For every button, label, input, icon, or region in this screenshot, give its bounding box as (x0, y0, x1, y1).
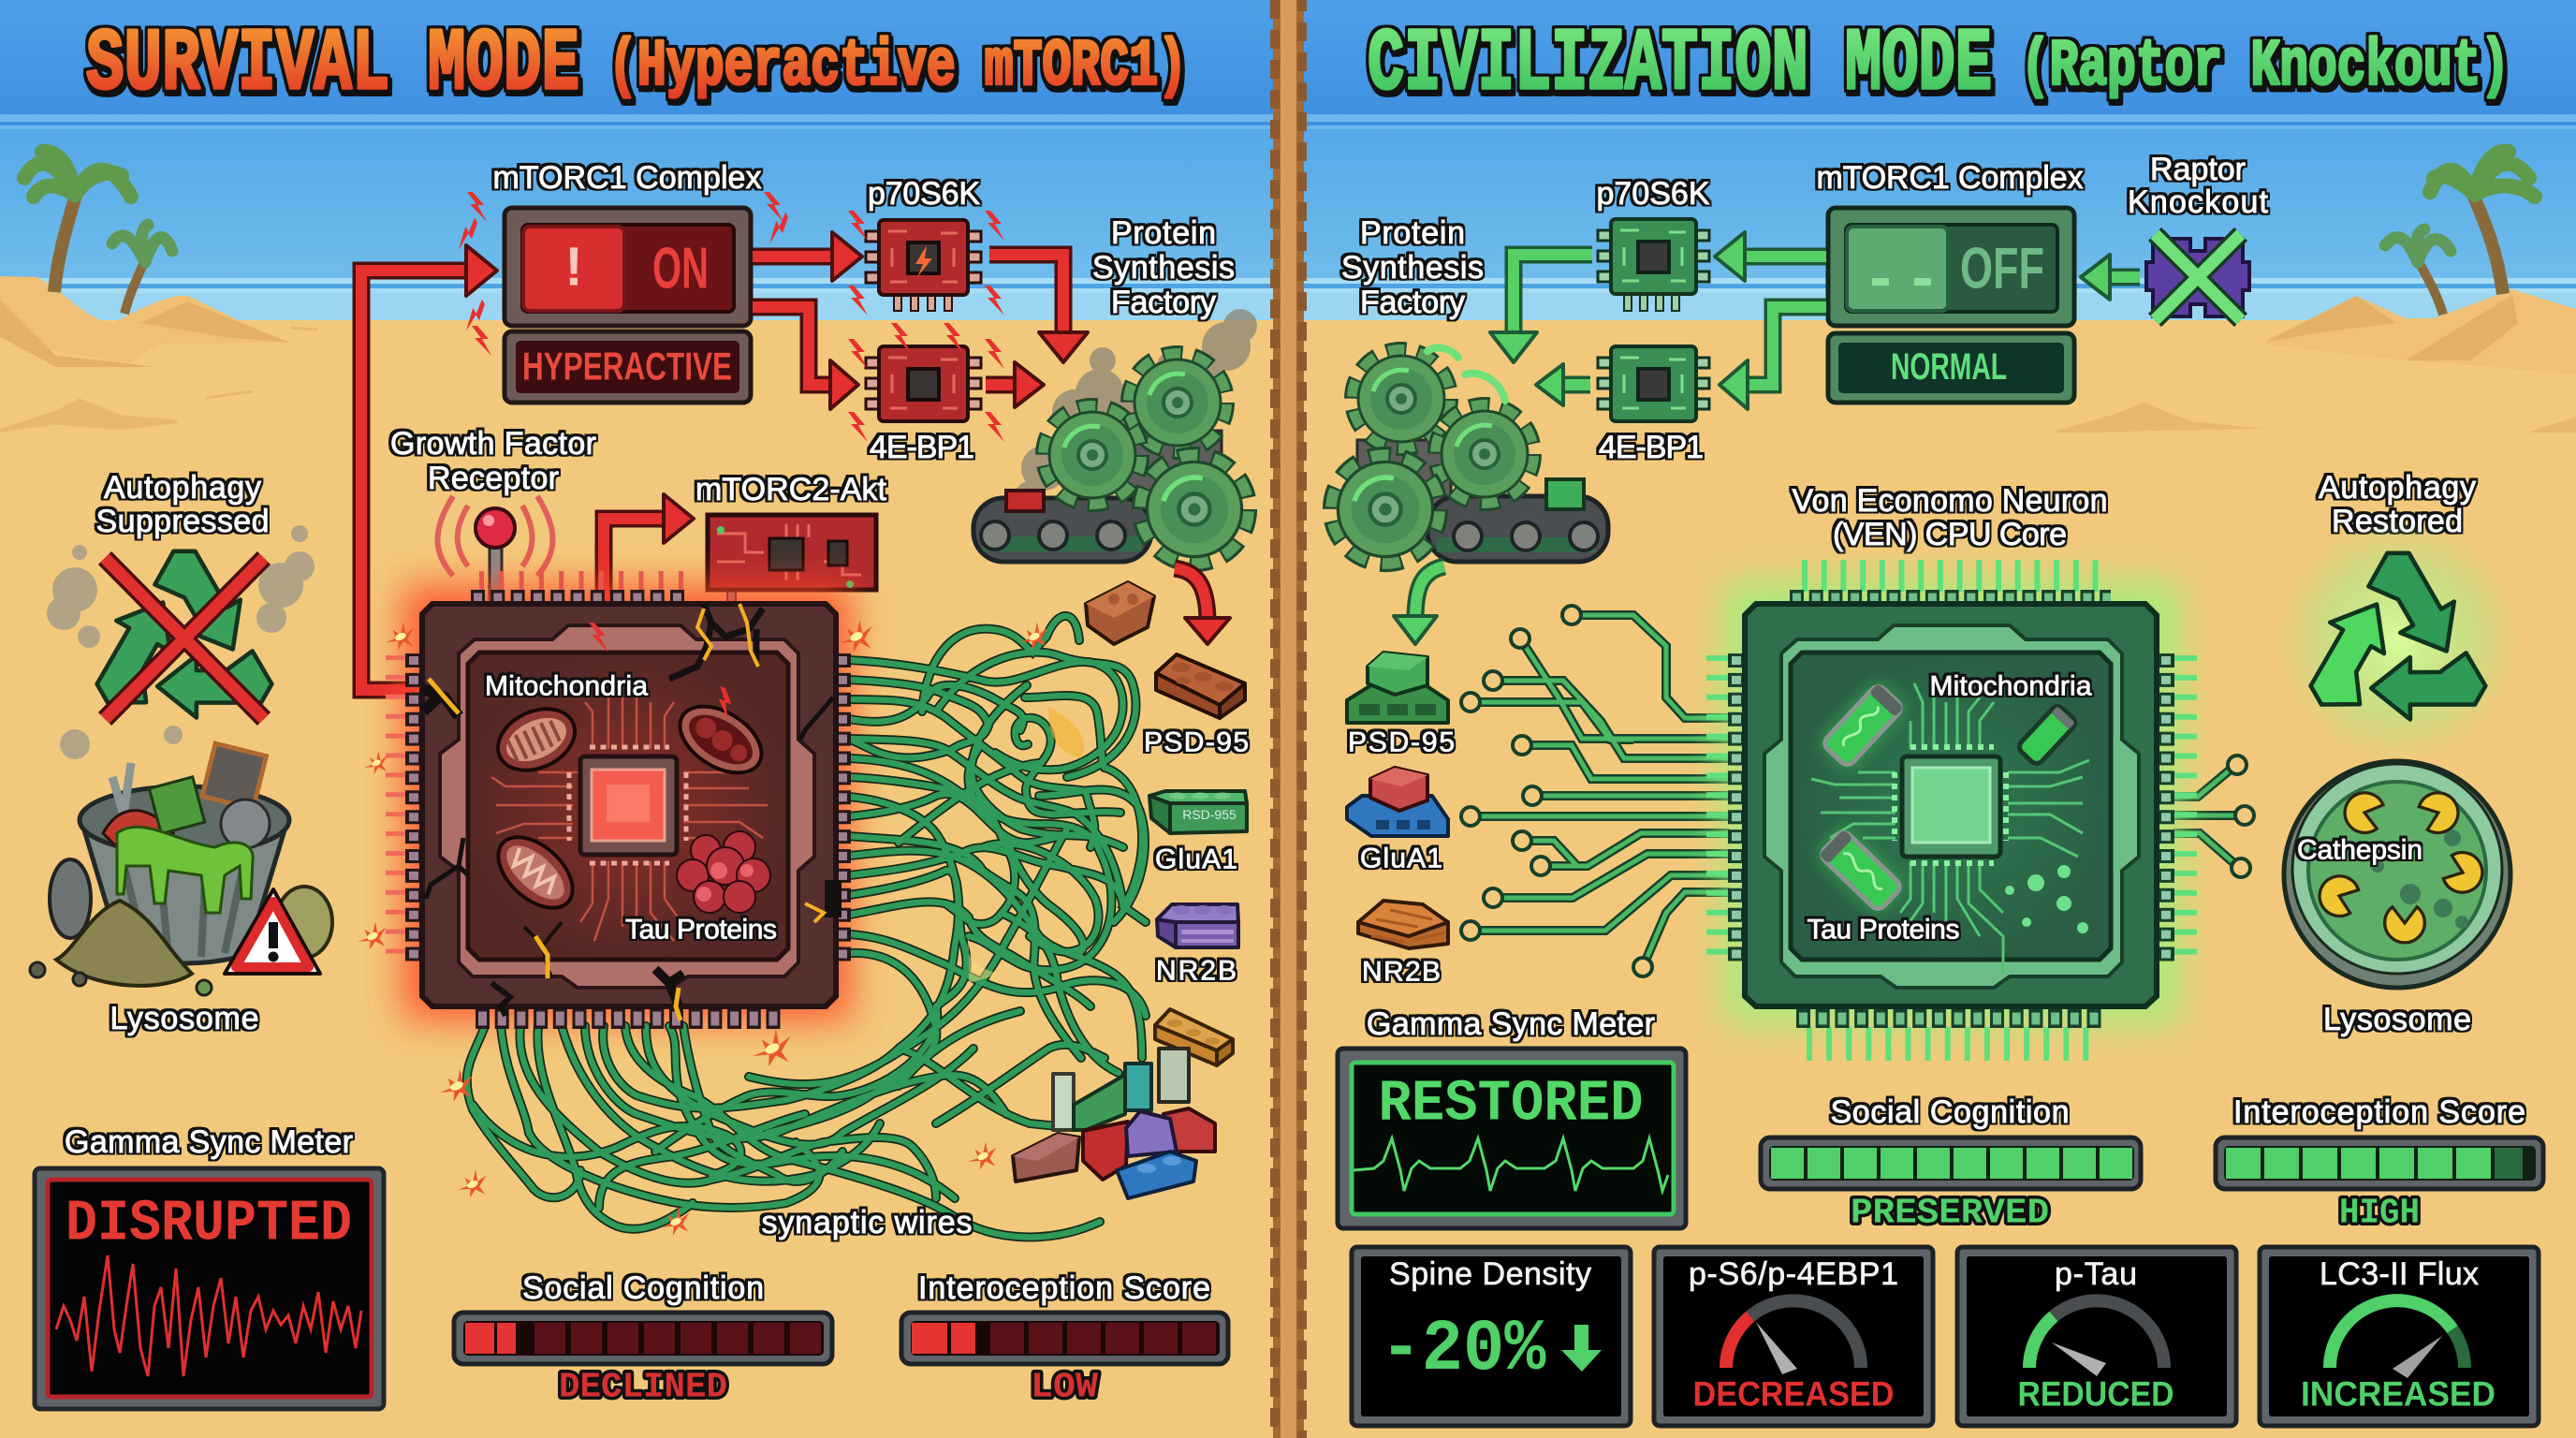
label: von economo neuron (1792, 483, 2108, 552)
label: protein synthesis factory left: Protein (1111, 215, 1216, 251)
board: mTORC2-Akt (695, 472, 887, 613)
label: protein synthesis factory right: Factory (1360, 285, 1465, 320)
chip: 4E-BP1 right (1598, 346, 1709, 465)
tau protein clump (677, 831, 770, 913)
panel: gamma sync meter restored (1338, 1006, 1686, 1228)
icon: crossed-out recycle symbol (47, 525, 315, 759)
card: LC3-II flux gauge: LC3-II Flux (2320, 1256, 2479, 1292)
icon: overflowing lysosome trash can (30, 743, 332, 995)
dirt pile (56, 901, 192, 986)
icon: PSD-95 brick right: PSD-95 (1348, 726, 1455, 758)
chip glow right (1722, 580, 2181, 1025)
icon: PSD-95 brick left: PSD-95 (1144, 726, 1249, 758)
label: protein synthesis factory left: Factory (1111, 285, 1216, 320)
panel: social cognition right (1761, 1094, 2141, 1234)
status panel: normal (1828, 333, 2074, 403)
arrow: switch to p70S6K (753, 232, 862, 281)
arrow: p70S6K to factory (989, 255, 1088, 362)
arrow: p70S6K to factory right (1490, 255, 1592, 362)
panel: social cognition left (454, 1270, 832, 1408)
label: von economo neuron: Von Economo Neuron (1792, 483, 2108, 519)
palm trees left (24, 152, 172, 314)
debris (2371, 829, 2468, 929)
chip: p70S6K left: p70S6K (868, 176, 980, 212)
arrow: switch to 4E-BP1 (753, 307, 858, 409)
label: growth factor receptor (390, 426, 596, 496)
tangled synaptic wires (467, 616, 1146, 1237)
central wooden divider (1273, 0, 1304, 1438)
panel: interoception score right (2216, 1094, 2543, 1234)
panel: mTORC1 complex switch off: mTORC1 Complex (1816, 160, 2084, 196)
panel: social cognition right: PRESERVED (1851, 1193, 2049, 1234)
card: spine density (1352, 1247, 1631, 1426)
circuit traces from chip to synapses (1461, 606, 2254, 976)
card: p-S6/p-4EBP1 gauge: p-S6/p-4EBP1 (1689, 1256, 1898, 1292)
label: tau proteins left: Tau Proteins (625, 914, 777, 946)
card: p-Tau gauge: REDUCED (2018, 1374, 2174, 1414)
icon: pile of scattered bricks (1013, 1009, 1233, 1198)
chip: p70S6K left (848, 176, 1004, 315)
smoke (1015, 309, 1257, 511)
status panel: normal: NORMAL (1891, 346, 2007, 388)
card: spine density: -20% (1380, 1309, 1546, 1391)
warning triangle (225, 889, 320, 974)
dirt and bags (50, 859, 91, 938)
chip: 4E-BP1 left: 4E-BP1 (870, 430, 974, 465)
cracks and lava (421, 604, 833, 1020)
arrow: raptor to mTORC1 (2081, 255, 2140, 300)
central die (1902, 756, 2000, 857)
switch track and button: ! (564, 236, 583, 298)
title: survival mode: SURVIVAL MODE (86, 16, 579, 115)
icon: NR2B brick right: NR2B (1362, 957, 1441, 987)
label: autophagy suppressed: Autophagy (104, 470, 261, 506)
icon: growth factor joystick (438, 496, 552, 601)
lightning bolts (448, 192, 796, 356)
panel: gamma sync meter disrupted: DISRUPTED (66, 1191, 352, 1256)
icon: NR2B brick left (1156, 904, 1238, 987)
arrow: 4E-BP1 to factory (986, 362, 1044, 407)
inner board (468, 653, 788, 960)
switch track and button (1846, 225, 2057, 312)
icon: healthy lysosome dish with cathepsin: Cathepsin (2297, 835, 2422, 865)
chip pins (1718, 576, 2186, 1044)
ring (440, 625, 814, 988)
glowing dots (2005, 865, 2088, 933)
trash contents (202, 743, 266, 809)
chip pins (397, 580, 842, 1019)
central die (580, 756, 677, 855)
label: synaptic wires: synaptic wires (762, 1205, 972, 1240)
switch track and button: ON (652, 236, 709, 301)
title: survival mode: (Hyperactive mTORC1) (608, 30, 1187, 105)
mitochondrion stressed (485, 824, 586, 921)
chip glow left (402, 585, 852, 1020)
arrow: chip to mTORC2-Akt (604, 494, 694, 601)
status panel: hyperactive: HYPERACTIVE (522, 345, 732, 388)
icon: smoking protein factory left (973, 309, 1257, 562)
card: LC3-II flux gauge (2260, 1247, 2539, 1426)
switch track and button: OFF (1960, 236, 2044, 301)
cathepsin pacmen (2314, 787, 2488, 943)
panel: gamma sync meter restored: RESTORED (1378, 1071, 1644, 1137)
panel: overheating CPU chip left (397, 580, 842, 1020)
circuit traces (491, 697, 768, 941)
arrow: switch to p70S6K right (1715, 232, 1826, 281)
panel: social cognition left: DECLINED (559, 1367, 727, 1408)
icon: NR2B brick left: NR2B (1156, 955, 1237, 987)
arrow: factory to bricks (1175, 568, 1230, 644)
arrow: growth loop from chip to mTORC1 (361, 245, 497, 690)
icon: GluA1 brick left: RSD-955 (1182, 807, 1237, 822)
card: p-Tau gauge (1957, 1247, 2236, 1426)
panel: mTORC1 complex switch off (1816, 160, 2084, 403)
panel: social cognition left: Social Cognition (522, 1270, 764, 1306)
panel: gamma sync meter disrupted: Gamma Sync Meter (65, 1124, 353, 1160)
conveyor belt (973, 491, 1151, 562)
icon: PSD-95 brick right (1347, 653, 1455, 758)
label: von economo neuron: (VEN) CPU Core (1833, 517, 2067, 552)
label: autophagy restored (2319, 470, 2476, 539)
switch housing (505, 208, 751, 326)
label: protein synthesis factory left: Synthesis (1092, 250, 1235, 286)
switch track and button (522, 225, 734, 312)
label: tau proteins right: Tau Proteins (1807, 914, 1960, 946)
icon: broken brick near factory (1086, 582, 1154, 644)
chip: p70S6K right: p70S6K (1597, 176, 1710, 212)
battery mitochondrion lower (1813, 823, 1909, 918)
label: lysosome left: Lysosome (110, 1001, 258, 1036)
smoke (47, 525, 315, 759)
icon: clean protein factory right (1335, 347, 1608, 562)
panel: interoception score left (901, 1270, 1228, 1408)
ring (1764, 625, 2139, 988)
label: protein synthesis factory right: Synthesis (1341, 250, 1484, 286)
card: p-S6/p-4EBP1 gauge: DECREASED (1692, 1374, 1895, 1414)
label: mitochondria left: Mitochondria (485, 670, 648, 702)
label: lysosome right: Lysosome (2323, 1002, 2471, 1037)
label: autophagy restored: Restored (2332, 504, 2463, 539)
icon: healthy lysosome dish with cathepsin (2284, 761, 2510, 988)
icon: GluA1 brick left (1149, 791, 1247, 874)
mitochondrion healthy (488, 697, 585, 782)
icon: glowing recycle symbol (2276, 519, 2520, 762)
board: mTORC2-Akt: mTORC2-Akt (695, 472, 887, 507)
battery mitochondrion small (2016, 703, 2078, 767)
sparks around overheating chip and wires (358, 620, 1084, 1235)
panel: healthy CPU chip right (1718, 576, 2186, 1044)
icon: GluA1 brick right: GluA1 (1360, 843, 1442, 874)
icon: raptor knockout X (2128, 152, 2269, 320)
card: p-S6/p-4EBP1 gauge (1654, 1247, 1933, 1426)
panel: social cognition right: Social Cognition (1831, 1094, 2069, 1130)
panel: interoception score right: Interoception Score (2233, 1094, 2525, 1130)
panel: gamma sync meter disrupted (35, 1124, 384, 1409)
icon: PSD-95 brick left (1144, 654, 1249, 758)
chip: 4E-BP1 right: 4E-BP1 (1599, 430, 1704, 465)
label: autophagy suppressed: Suppressed (95, 504, 270, 539)
title: survival mode (86, 16, 1187, 115)
panel: interoception score right: HIGH (2339, 1193, 2420, 1234)
label: mitochondria right: Mitochondria (1930, 670, 2092, 702)
card: p-Tau gauge: p-Tau (2055, 1256, 2137, 1292)
label: growth factor receptor: Growth Factor (390, 426, 596, 462)
rotation arrows (1427, 347, 1505, 401)
arrow: factory to PSD-95 right (1394, 566, 1444, 644)
label: mTORC1 complex: mTORC1 Complex (492, 160, 762, 196)
card: LC3-II flux gauge: INCREASED (2301, 1374, 2496, 1414)
label: autophagy suppressed (95, 470, 270, 539)
arrow: switch to 4E-BP1 right (1720, 307, 1826, 409)
title: civilization mode: CIVILIZATION MODE (1368, 16, 1992, 115)
label: growth factor receptor: Receptor (428, 461, 559, 496)
arrow: 4E-BP1 to factory right (1536, 364, 1590, 405)
palm trees right (2385, 152, 2535, 315)
icon: NR2B brick right (1358, 901, 1448, 987)
battery mitochondrion large (1816, 678, 1910, 773)
panel: gamma sync meter restored: Gamma Sync Meter (1367, 1006, 1655, 1042)
chip: p70S6K right (1597, 176, 1710, 311)
icon: raptor knockout X: Raptor (2150, 152, 2246, 187)
chart: erratic waveform (56, 1255, 361, 1376)
icon: GluA1 brick right (1347, 768, 1448, 874)
circuit traces (1811, 683, 2089, 974)
mitochondrion damaged (668, 693, 773, 786)
panel: interoception score left: LOW (1031, 1367, 1098, 1408)
label: protein synthesis factory right: Protein (1360, 215, 1465, 251)
label: protein synthesis factory right (1341, 215, 1484, 320)
label: protein synthesis factory left (1092, 215, 1235, 320)
status panel: hyperactive (505, 331, 751, 403)
label: autophagy restored: Autophagy (2319, 470, 2476, 506)
panel: interoception score left: Interoception Score (918, 1270, 1210, 1306)
card: spine density: Spine Density (1389, 1256, 1591, 1292)
inner board (1791, 653, 2111, 960)
conveyor belt (1427, 479, 1608, 562)
chart: regular waveform (1354, 1138, 1668, 1191)
chip: 4E-BP1 left (848, 323, 1004, 465)
panel: mTORC1 complex switch on (448, 160, 796, 403)
icon: GluA1 brick left: GluA1 (1155, 844, 1237, 874)
icon: raptor knockout X: Knockout (2128, 184, 2269, 220)
